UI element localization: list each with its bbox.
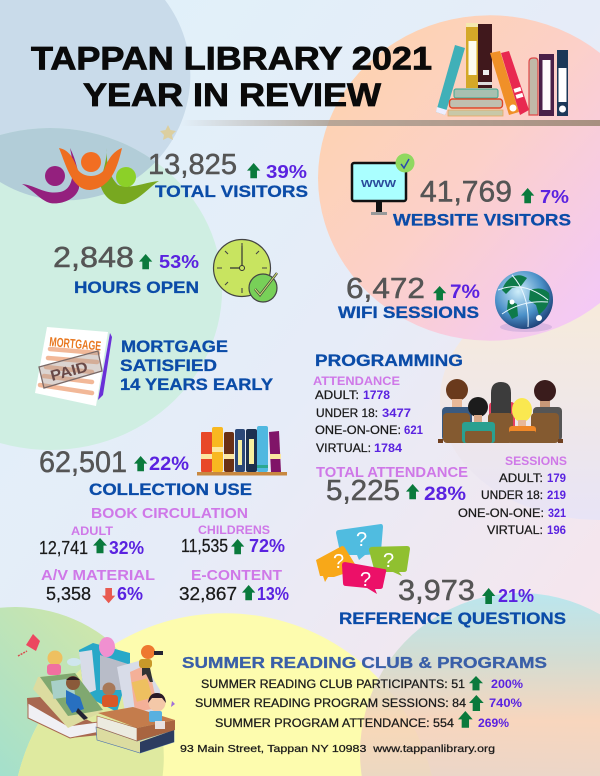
lower left book: [27, 697, 100, 738]
attendance breakdown: ADULT:: [315, 390, 359, 402]
attendance breakdown: [313, 374, 424, 455]
sessions row: SUMMER READING PROGRAM SESSIONS: 84: [195, 698, 467, 710]
heading: SUMMER READING CLUB & PROGRAMS: [182, 655, 547, 672]
girl sitting: [148, 693, 175, 729]
e-content: 32,867: [179, 584, 237, 604]
a/v material: 6%: [117, 583, 143, 604]
icon: speech bubbles: [316, 524, 410, 594]
percent: 21%: [498, 585, 534, 606]
icon: globe: [495, 271, 553, 332]
label: WIFI SESSIONS: [338, 303, 479, 322]
arrow up: [521, 188, 534, 203]
panel: hours open: [53, 240, 277, 302]
percent: 53%: [159, 251, 199, 272]
panel: total visitors: [22, 148, 308, 204]
icon: speech bubbles: ?: [356, 529, 367, 551]
childrens circulation: [181, 523, 285, 556]
childrens circulation: 11,535: [181, 536, 228, 556]
attendance row: SUMMER PROGRAM ATTENDANCE: 554: [215, 718, 455, 730]
total attendance: 28%: [424, 484, 466, 505]
icon: three people: [22, 148, 159, 204]
participants row: 200%: [491, 679, 523, 691]
total attendance: [316, 465, 468, 507]
attendance breakdown: UNDER 18:: [316, 408, 378, 420]
panel: collection use: [39, 426, 289, 604]
attendance row: [215, 711, 509, 730]
label: TOTAL VISITORS: [155, 182, 308, 201]
attendance row: 269%: [478, 718, 509, 730]
arrow up: [139, 254, 152, 269]
adult circulation: ADULT: [71, 524, 114, 538]
icon: mortgage paid document: [35, 327, 112, 406]
icon: monitor: WWW: [361, 178, 396, 190]
icon: mortgage paid document: MORTGAGE: [49, 334, 102, 354]
adult circulation: [39, 524, 144, 558]
number: 2,848: [53, 242, 134, 274]
heading: PROGRAMMING: [315, 351, 463, 370]
panel: reference questions: [316, 524, 566, 628]
icon: speech bubbles: ?: [383, 550, 394, 572]
number: 41,769: [420, 176, 512, 208]
child with paintbrush: [102, 682, 118, 707]
icon: star: [160, 125, 176, 140]
attendance breakdown: VIRTUAL:: [316, 443, 371, 455]
open book behind: [79, 643, 130, 712]
arrow up: [433, 286, 446, 300]
sessions breakdown: UNDER 18:: [481, 490, 543, 502]
label: REFERENCE QUESTIONS: [339, 609, 566, 628]
adult circulation: 12,741: [39, 538, 88, 558]
participants row: [201, 676, 523, 691]
shelf: [180, 120, 600, 126]
number: 3,973: [398, 575, 475, 607]
girl top-left with bubbles: [47, 650, 81, 675]
sessions breakdown: ADULT:: [499, 473, 543, 485]
percent: 22%: [149, 454, 189, 475]
a/v material: A/V MATERIAL: [41, 568, 155, 584]
label: 14 YEARS EARLY: [120, 376, 273, 394]
attendance breakdown: ONE-ON-ONE:: [315, 425, 401, 437]
percent: 7%: [540, 186, 569, 207]
icon: bookshelf books: [436, 23, 568, 116]
kite: [18, 634, 40, 656]
number: 6,472: [346, 273, 425, 305]
label: [120, 338, 273, 394]
childrens circulation: CHILDRENS: [198, 523, 270, 537]
attendance breakdown: 1784: [374, 443, 403, 455]
label: WEBSITE VISITORS: [393, 210, 571, 230]
tilted book with boy: [33, 673, 102, 728]
e-content: E-CONTENT: [191, 568, 282, 584]
panel: programming: [313, 351, 567, 537]
address: 93 Main Street, Tappan NY 10983 www.tappanlibrary.org: [180, 743, 495, 755]
attendance breakdown: ATTENDANCE: [313, 374, 400, 388]
icon: clock with check: [214, 240, 277, 302]
icon: monitor: [352, 154, 414, 215]
icon: row of books: [197, 426, 287, 476]
panel: wifi sessions: [338, 271, 553, 332]
label: MORTGAGE: [121, 338, 228, 356]
panel: website visitors: [352, 154, 571, 230]
sessions row: 740%: [489, 698, 522, 710]
panel: summer reading club: [180, 655, 547, 755]
childrens circulation: 72%: [249, 535, 285, 556]
label: SATISFIED: [120, 357, 217, 375]
icon: speech bubbles: ?: [333, 551, 344, 573]
sessions breakdown: 179: [547, 473, 566, 485]
attendance breakdown: 1778: [363, 390, 391, 402]
arrow up: [482, 588, 495, 604]
boy with binoculars: [139, 645, 163, 682]
panel: mortgage satisfied: [35, 327, 273, 406]
percent: 39%: [266, 161, 307, 182]
book circulation heading: BOOK CIRCULATION: [91, 505, 248, 522]
icon: audience: [438, 379, 563, 443]
icon: speech bubbles: ?: [360, 569, 371, 591]
adult circulation: 32%: [109, 537, 144, 558]
sessions row: [195, 695, 522, 711]
total attendance: TOTAL ATTENDANCE: [316, 465, 468, 481]
sessions breakdown: 219: [547, 490, 566, 502]
title: [31, 40, 432, 113]
attendance breakdown: 3477: [382, 408, 411, 420]
label: HOURS OPEN: [74, 278, 199, 297]
arrow up: [134, 456, 147, 471]
balloon: [99, 637, 115, 657]
a/v material: 5,358: [46, 584, 91, 604]
sessions breakdown: VIRTUAL:: [487, 525, 543, 537]
arrow up: [247, 163, 260, 178]
icon: mortgage paid document: PAID: [49, 359, 90, 385]
sessions breakdown: SESSIONS: [505, 454, 567, 468]
number: 13,825: [148, 149, 237, 181]
lower right books: [96, 707, 175, 753]
sessions breakdown: [458, 454, 567, 537]
title: YEAR IN REVIEW: [83, 77, 382, 113]
a/v material: [41, 568, 155, 604]
sessions breakdown: 321: [548, 508, 567, 520]
participants row: SUMMER READING CLUB PARTICIPANTS: 51: [201, 679, 465, 691]
label: COLLECTION USE: [89, 480, 252, 499]
sessions breakdown: 196: [547, 525, 566, 537]
title: TAPPAN LIBRARY 2021: [31, 40, 432, 76]
percent: 7%: [450, 282, 480, 303]
sessions breakdown: ONE-ON-ONE:: [458, 508, 544, 520]
total attendance: 5,225: [326, 475, 400, 507]
e-content: 13%: [257, 583, 289, 604]
attendance breakdown: 621: [404, 425, 424, 437]
number: 62,501: [39, 446, 127, 479]
e-content: [179, 568, 289, 604]
illustration: children reading on books: [18, 634, 175, 753]
